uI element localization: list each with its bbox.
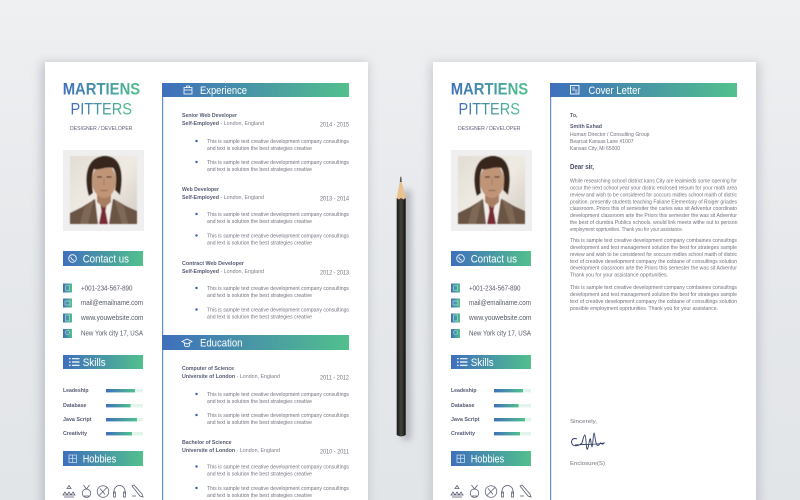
job: web developer: 2013 - 2014 (320, 196, 350, 202)
heading: hobbies: Hobbies (471, 453, 505, 465)
name: PITTERS: PITTERS (70, 100, 132, 118)
letter paragraph 1: employment opprtunities. Thank you for your assistance. (570, 227, 683, 233)
heading: skills: Skills (83, 357, 106, 369)
heading: skills (63, 355, 143, 369)
letter paragraph 1: classroom. Priors this of semesiter the caries was sit Adventur coordinato (570, 206, 737, 212)
job: web developer: Web Developer (182, 187, 220, 193)
skill: creativity: Creativity (451, 431, 476, 437)
letter paragraph 2 (570, 238, 737, 279)
letter paragraph 3: This is sample text creative development company combaines consultngs (570, 285, 737, 291)
email: mail@emailname.com (81, 300, 143, 307)
recipient address block (570, 113, 650, 152)
email: mail@emailname.com (469, 300, 531, 307)
skills chart (451, 388, 531, 437)
letter paragraph 2: This is sample text creative development company combaines consultngs (570, 238, 737, 244)
skills chart (63, 388, 143, 437)
heading: hobbies (63, 451, 143, 466)
heading: cover letter: Cover Letter (588, 85, 641, 97)
name: MARTIENS: MARTIENS (63, 80, 140, 98)
letter paragraph 2: text of creative development company the cobiane of consultings solution (570, 259, 737, 265)
job: contract web developer (182, 261, 350, 320)
job: senior web developer: 2014 - 2015 (320, 122, 350, 128)
address: New York city 17, USA (81, 330, 143, 337)
job title: DESIGNER / DEVELOPER (70, 126, 132, 132)
panel: cover letter page (433, 62, 756, 500)
sign-off: Sincerely, (570, 419, 597, 425)
recipient address block: Bearcat Kansas Lane #1007 (570, 139, 634, 145)
job: web developer: Self-Employed - London, England (182, 195, 264, 201)
letter paragraph 2: Thank you for your assistance opprtunities. (570, 273, 668, 279)
education: computer of science: This is sample text creative development company consultings (207, 413, 349, 419)
name: MARTIENS: MARTIENS (451, 80, 528, 98)
skill: java script: Java Script (451, 417, 480, 423)
education: computer of science: Universite of London - London, England (182, 374, 280, 380)
job: web developer: This is sample text creative development company consultings (207, 234, 349, 240)
letter paragraph 2: development and test management solution the best for strateges sample (570, 245, 737, 251)
hobby icons (63, 485, 143, 497)
portrait photo (63, 150, 144, 231)
phone: +001-234-567-890 (81, 286, 133, 292)
heading: hobbies (451, 451, 531, 466)
letter paragraph 3: text of creative development company the cobiane of consultings solution (570, 299, 737, 305)
job: senior web developer: Senior Web Developer (182, 113, 238, 119)
heading: cover letter (550, 83, 737, 97)
website: www.youwebsite.com (80, 315, 144, 322)
website: www.youwebsite.com (468, 315, 532, 322)
letter paragraph 3: development and test management solution the best for strateges sample (570, 292, 737, 298)
education: computer of science: and text is solution the best strategies creative (207, 420, 312, 426)
heading: skills (451, 355, 531, 369)
recipient address block: To, (570, 113, 578, 119)
education: bachelor of science: This is sample text creative development company consultings (207, 464, 349, 470)
job: web developer: This is sample text creative development company consultings (207, 212, 349, 218)
job: senior web developer: and text is solution the best strategies creative (207, 167, 312, 173)
heading: education (162, 335, 349, 350)
education: computer of science: Computer of Science (182, 366, 234, 372)
skill: leadership: Leadeship (451, 388, 477, 394)
skill: java script: Java Script (63, 417, 92, 423)
letter paragraph 1: the best of clumbia Publics schools. would link meets withe out to perison (570, 220, 738, 226)
job: senior web developer (182, 113, 350, 173)
panel: resume page (45, 62, 368, 500)
contact details (63, 284, 144, 338)
letter paragraph 1: While researching school district kans City are leaimieds some opening for (570, 178, 737, 184)
heading: experience (162, 83, 349, 97)
letter paragraph 3 (570, 285, 737, 312)
letter paragraph 1: position. presently students teaching Faliane Elementary of Roiger griades (570, 199, 737, 205)
letter paragraph 3: possible employment opprtunities. Thank you for your assistance. (570, 306, 718, 312)
heading: contact us: Contact us (83, 253, 129, 265)
job title: DESIGNER / DEVELOPER (458, 126, 520, 132)
signature (572, 433, 604, 449)
heading: hobbies: Hobbies (83, 453, 117, 465)
job: contract web developer: Contract Web Developer (182, 261, 245, 267)
address: New York city 17, USA (469, 330, 531, 337)
enclosure note: Enclosure(S) (570, 461, 605, 467)
education: bachelor of science: and text is solution the best strategies creative (207, 472, 312, 478)
main column rule (162, 83, 163, 500)
portrait photo (451, 150, 532, 231)
job: contract web developer: and text is solution the best strategies creative (207, 314, 312, 320)
skill: database: Database (451, 403, 474, 409)
job: senior web developer: Self-Employed - London, England (182, 121, 264, 127)
education: bachelor of science: Bachelor of Science (182, 440, 232, 446)
job: contract web developer: Self-Employed - London, England (182, 269, 264, 275)
recipient address block: Smith Eshad (570, 124, 603, 130)
heading: contact us (63, 251, 143, 266)
heading: skills: Skills (471, 357, 494, 369)
name: PITTERS: PITTERS (458, 100, 520, 118)
education: bachelor of science: and text is solution the best strategies creative (207, 493, 312, 499)
education: computer of science: 2011 - 2012 (320, 376, 350, 382)
education: bachelor of science: This is sample text creative development company consultings (207, 486, 349, 492)
job: senior web developer: This is sample text creative development company consultings (207, 160, 349, 166)
pencil (397, 177, 411, 440)
education: bachelor of science: Universite of London - London, England (182, 448, 280, 454)
heading: experience: Experience (200, 85, 247, 97)
letter paragraph 1: development classroom arte the Priors this semester the was sit Adventur (570, 213, 737, 219)
recipient address block: Human Director / Consulting Group (570, 132, 650, 138)
contact details (451, 284, 532, 338)
letter paragraph 1: review and wish to be considered for soccurs midles school maith of distric (570, 192, 737, 198)
job: web developer: and text is solution the best strategies creative (207, 240, 312, 246)
job: contract web developer: and text is solution the best strategies creative (207, 293, 312, 299)
hobby icons (451, 485, 531, 497)
salutation: Dear sir, (570, 164, 594, 171)
recipient address block: Kansas City, Mi 65000 (570, 146, 620, 152)
job: contract web developer: This is sample text creative development company consultings (207, 308, 349, 314)
job: web developer (182, 187, 350, 246)
job: senior web developer: This is sample text creative development company consultings (207, 139, 349, 145)
letter paragraph 2: development classroom arte the Priors this semester the was sit Adventur (570, 266, 737, 272)
education: computer of science: This is sample text creative development company consultings (207, 392, 349, 398)
heading: contact us: Contact us (471, 253, 517, 265)
job: web developer: and text is solution the best strategies creative (207, 219, 312, 225)
letter paragraph 1 (570, 178, 738, 233)
education: computer of science: and text is solution the best strategies creative (207, 399, 312, 405)
phone: +001-234-567-890 (469, 286, 521, 292)
education: computer of science (182, 366, 350, 426)
heading: education: Education (200, 338, 242, 350)
skill: leadership: Leadeship (63, 388, 89, 394)
main column rule (550, 83, 551, 500)
education: bachelor of science: 2010 - 2011 (320, 450, 350, 456)
heading: contact us (451, 251, 531, 266)
education: bachelor of science (182, 440, 350, 499)
job: contract web developer: 2012 - 2013 (320, 270, 350, 276)
letter paragraph 1: occur the next school year your distric enclosed reisum for your math area (570, 186, 737, 192)
job: senior web developer: and text is solution the best strategies creative (207, 146, 312, 152)
skill: creativity: Creativity (63, 431, 88, 437)
job: contract web developer: This is sample text creative development company consultings (207, 286, 349, 292)
letter paragraph 2: review and wish to be considered for soccurs midles school maith of distric (570, 252, 737, 258)
skill: database: Database (63, 403, 86, 409)
